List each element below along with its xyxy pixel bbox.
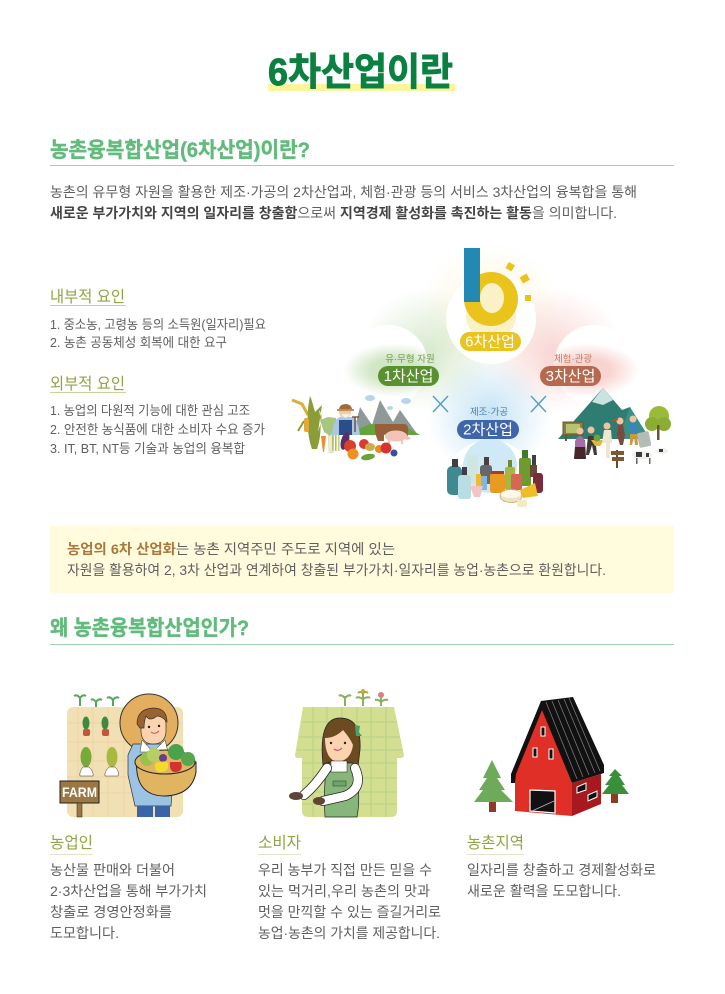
label: 6th industry: 6차산업 <box>465 334 515 350</box>
label: 1st industry <box>378 354 439 386</box>
illustration: consumer <box>289 689 404 817</box>
illustration: barn <box>474 697 629 816</box>
text: consumers: 멋을 만끽할 수 있는 즐길거리로 <box>258 904 441 920</box>
text: farmers: 농업인 <box>50 834 93 852</box>
external factors: 1. 농업의 다원적 기능에 대한 관심 고조 <box>50 403 250 418</box>
internal factors: 1. 중소농, 고령농 등의 소득원(일자리)필요 <box>50 317 266 332</box>
label: 2nd industry: 제조·가공 <box>470 407 508 418</box>
text: rural areas <box>467 834 656 899</box>
text: farmers <box>50 834 207 941</box>
intro paragraph <box>50 184 637 221</box>
label: 1st industry: 1차산업 <box>384 368 433 385</box>
callout <box>50 526 674 593</box>
glow backgrounds <box>343 243 639 532</box>
text: farmers: 도모합니다. <box>50 925 119 941</box>
intro paragraph: 새로운 부가가치와 지역의 일자리를 창출함으로써 지역경제 활성화를 촉진하는 활동을 의미합니다. <box>50 205 617 221</box>
illustration: farm <box>292 395 420 461</box>
label: 3rd industry <box>540 353 601 386</box>
text: consumers <box>258 834 441 941</box>
heading: what is 6th industry: 농촌융복합산업(6차산업)이란? <box>50 139 310 162</box>
text: consumers: 소비자 <box>258 834 301 852</box>
illustration: tourism <box>558 388 671 468</box>
illustration: processed products <box>447 450 543 507</box>
callout: 자원을 활용하여 2, 3차 산업과 연계하여 창출된 부가가치·일자리를 농업·농촌으로 환원합니다. <box>67 562 606 578</box>
text: rural areas: 일자리를 창출하고 경제활성화로 <box>467 862 656 878</box>
heading: why: 왜 농촌융복합산업인가? <box>50 617 249 640</box>
internal factors: 2. 농촌 공동체성 회복에 대한 요구 <box>50 335 227 350</box>
text: farmers: 2·3차산업을 통해 부가가치 <box>50 883 207 899</box>
label: 2nd industry <box>457 407 519 439</box>
text: consumers: 우리 농부가 직접 만든 믿을 수 <box>258 862 432 878</box>
icon: multiply left <box>433 396 448 412</box>
label: 3rd industry: 체험·관광 <box>554 353 592 365</box>
text: consumers: 농업·농촌의 가치를 제공합니다. <box>258 925 440 941</box>
text: consumers: 있는 먹거리,우리 농촌의 맛과 <box>258 883 430 899</box>
illustration: farmer: FARM <box>62 784 97 800</box>
external factors: 3. IT, BT, NT등 기술과 농업의 융복합 <box>50 441 245 456</box>
icon: b logo <box>464 248 531 326</box>
diagram: 6th industry <box>292 243 671 532</box>
external factors: 외부적 요인 <box>50 375 125 393</box>
text: farmers: 농산물 판매와 더불어 <box>50 862 175 878</box>
internal factors <box>50 288 266 350</box>
external factors: 2. 안전한 농식품에 대한 소비자 수요 증가 <box>50 422 265 437</box>
icon: multiply right <box>531 396 546 412</box>
internal factors: 내부적 요인 <box>50 288 125 306</box>
text: rural areas: 새로운 활력을 도모합니다. <box>467 883 621 899</box>
external factors <box>50 375 265 456</box>
label: 2nd industry: 2차산업 <box>463 422 513 438</box>
callout: 농업의 6차 산업화는 농촌 지역주민 주도로 지역에 있는 <box>67 541 395 557</box>
title: 6차산업이란 <box>268 52 453 94</box>
text: farmers: 창출로 경영안정화를 <box>50 904 172 920</box>
label: 1st industry: 유·무형 자원 <box>385 354 435 365</box>
label: 3rd industry: 3차산업 <box>546 368 595 385</box>
illustration: farmer <box>60 694 196 817</box>
text: rural areas: 농촌지역 <box>467 834 524 852</box>
intro paragraph: 농촌의 유무형 자원을 활용한 제조·가공의 2차산업과, 체험·관광 등의 서비스 3차산업의 융복합을 통해 <box>50 184 637 200</box>
